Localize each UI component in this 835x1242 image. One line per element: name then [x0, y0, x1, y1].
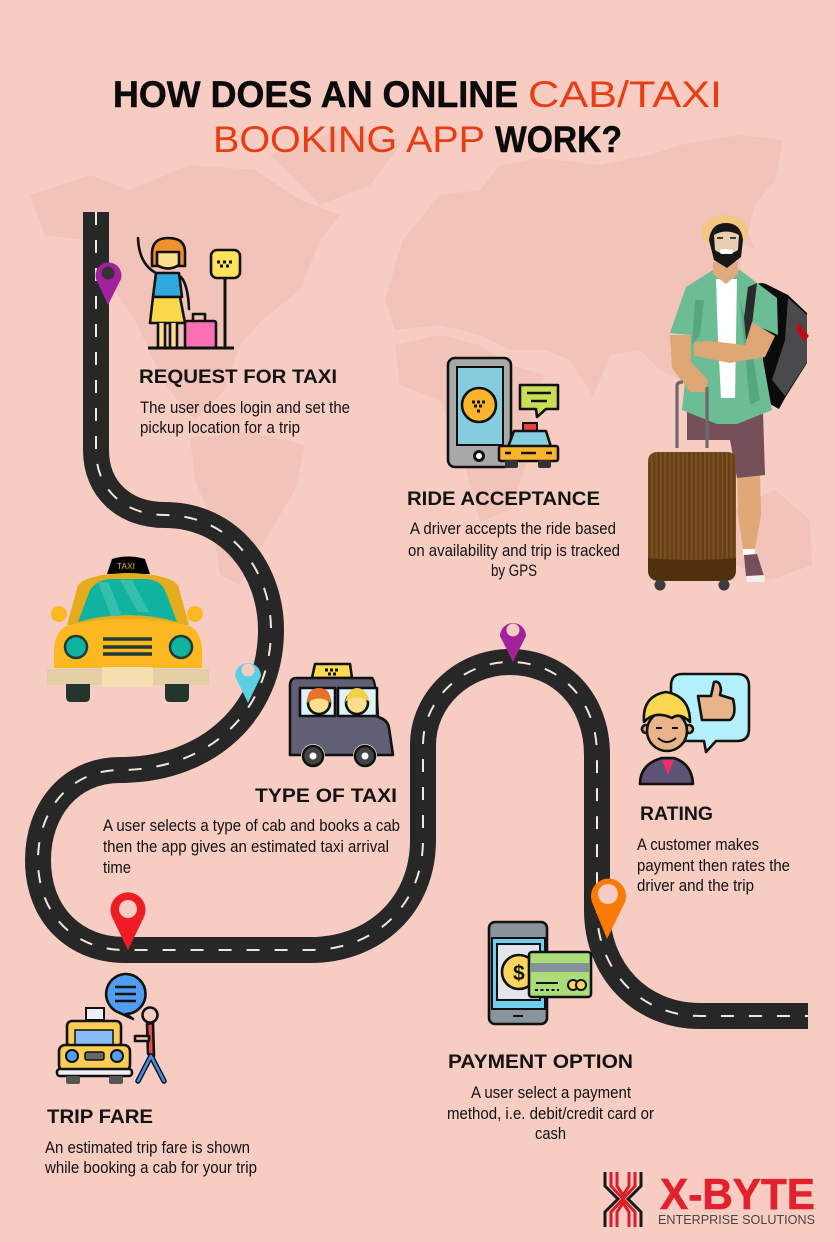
text block: payment option — [447, 1051, 654, 1143]
icon: taxi van with passengers — [290, 664, 393, 768]
suitcase handle — [677, 382, 707, 448]
text block: type of taxi: A user selects a type of cab and books a cab — [103, 817, 400, 835]
text block: ride acceptance: A driver accepts the ride based — [410, 520, 616, 538]
icon: yellow taxi front — [47, 556, 209, 702]
title: BOOKING APP — [213, 119, 485, 160]
text block: request for taxi: pickup location for a trip — [140, 419, 300, 437]
text block: type of taxi — [103, 785, 400, 877]
text block: request for taxi: The user does login and set the — [140, 399, 350, 417]
text block: type of taxi: TYPE OF TAXI — [255, 785, 397, 807]
pin: blue type of taxi — [235, 663, 261, 703]
logo: X-Byte Enterprise Solutions: ENTERPRISE SOLUTIONS — [658, 1213, 815, 1227]
text block: trip fare: TRIP FARE — [47, 1106, 153, 1128]
text block: trip fare: An estimated trip fare is shown — [45, 1139, 250, 1157]
icon: rating thumbs up — [640, 674, 749, 784]
text block: payment option: cash — [535, 1125, 566, 1143]
shirt — [670, 270, 778, 424]
text block: ride acceptance: by GPS — [491, 562, 537, 580]
backpack — [745, 283, 809, 409]
title: HOW DOES AN ONLINE — [113, 74, 518, 115]
text block: request for taxi: REQUEST FOR TAXI — [139, 366, 337, 388]
logo: X-Byte Enterprise Solutions: X-BYTE — [660, 1170, 815, 1219]
illustration: traveller with suitcase — [648, 215, 809, 590]
head — [702, 215, 748, 249]
text block: rating: RATING — [640, 803, 713, 825]
logo: X-Byte Enterprise Solutions — [605, 1170, 815, 1227]
pin: purple request — [95, 262, 122, 305]
text block: rating — [637, 803, 790, 895]
pin: purple payment — [500, 623, 526, 662]
text block: type of taxi: time — [103, 859, 131, 877]
text block: rating: A customer makes — [637, 836, 759, 854]
world map background — [30, 130, 812, 585]
winding road — [38, 212, 808, 1016]
title — [113, 74, 722, 160]
text block: payment option: A user select a payment — [471, 1084, 631, 1102]
icon: phone with coin and credit card: $ — [513, 962, 525, 985]
text block: ride acceptance: RIDE ACCEPTANCE — [407, 488, 600, 510]
text block: ride acceptance: on availability and trip is tracked — [408, 542, 620, 560]
suitcase — [648, 452, 736, 581]
text block: payment option: PAYMENT OPTION — [448, 1051, 633, 1073]
title: CAB/TAXI — [528, 74, 722, 115]
title: WORK? — [495, 119, 622, 160]
icon: yellow taxi front: TAXI — [117, 562, 135, 571]
icon: woman hailing taxi — [138, 238, 240, 348]
pin: red trip fare — [110, 892, 146, 950]
arms — [670, 335, 708, 392]
text block: rating: payment then rates the — [637, 857, 790, 875]
text block: ride acceptance — [407, 488, 620, 580]
icon: phone with taxi and message — [448, 358, 558, 468]
text block: trip fare: while booking a cab for your trip — [44, 1159, 257, 1177]
pin: orange rating — [591, 879, 626, 939]
icon: taxi and walking passenger — [57, 974, 164, 1084]
icon: phone with coin and credit card — [489, 922, 591, 1024]
text block: type of taxi: then the app gives an estimated taxi arrival — [103, 838, 389, 856]
text block: request for taxi — [139, 366, 350, 437]
text block: rating: driver and the trip — [637, 877, 754, 895]
text block: trip fare — [44, 1106, 257, 1177]
text block: payment option: method, i.e. debit/credit card or — [447, 1105, 654, 1123]
